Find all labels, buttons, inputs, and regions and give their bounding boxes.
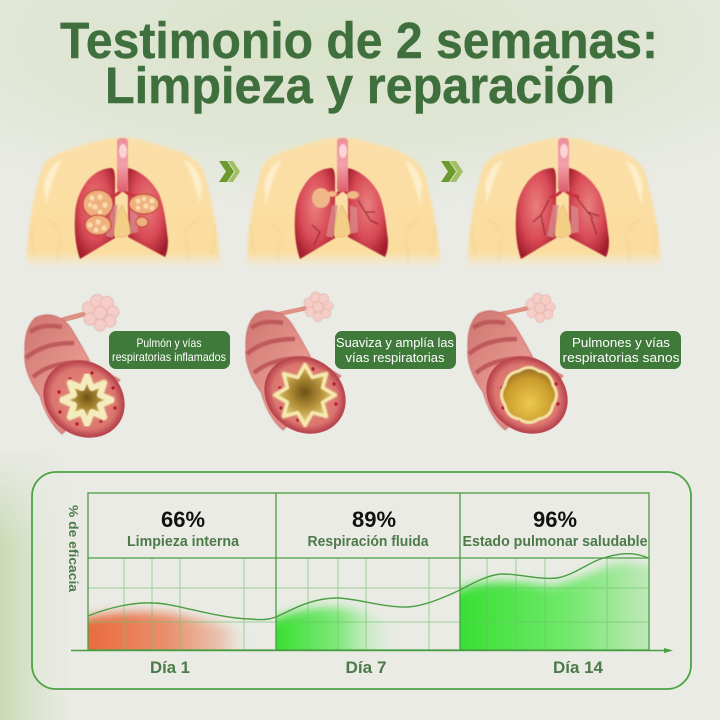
x axis day labels (150, 658, 604, 677)
label: stage 3: respiratorias sanos (562, 351, 680, 365)
x axis day labels: Día 7 (346, 658, 386, 677)
stat: day 14: Estado pulmonar saludable (462, 534, 648, 550)
title (60, 12, 658, 114)
label: stage 2: vías respiratorias (346, 351, 444, 365)
stat: day 14: 96% (533, 507, 577, 532)
label: stage 2: Suaviza y amplía las (336, 336, 454, 350)
title: Testimonio de 2 semanas: (60, 12, 658, 69)
stat: day 1 (127, 507, 240, 550)
lungs stage 1: inflamed torso (27, 138, 220, 268)
label: stage 3: Pulmones y vías (572, 336, 670, 350)
stat: day 1: 66% (161, 507, 205, 532)
area fill: day 14 green (460, 558, 648, 650)
stat: day 1: Limpieza interna (127, 534, 240, 550)
stat: day 14 (462, 507, 648, 550)
stat: day 7: 89% (352, 507, 396, 532)
stat: day 7 (308, 507, 429, 550)
arrow: stage 2 to 3 (441, 161, 463, 182)
title: Limpieza y reparación (105, 57, 615, 114)
label: stage 2 (335, 331, 456, 369)
area fill: day 1 orange (88, 605, 240, 650)
label: stage 1: Pulmón y vías (136, 336, 202, 350)
stat: day 7: Respiración fluida (308, 534, 429, 550)
area fill: day 7 green (276, 600, 384, 650)
arrow: stage 1 to 2 (219, 161, 240, 182)
airway stage 1: inflamed (25, 294, 139, 453)
efficacy curve (88, 554, 648, 620)
lungs stage 3: healthy torso (468, 138, 661, 268)
label: stage 3 (560, 331, 681, 369)
panel: efficacy chart (32, 472, 691, 689)
label: stage 1: respiratorias inflamados (112, 350, 226, 364)
label: stage 1 (109, 331, 230, 369)
airway stage 3: healthy (468, 293, 582, 449)
x axis day labels: Día 1 (150, 658, 190, 677)
x axis day labels: Día 14 (553, 658, 604, 677)
airway stage 2: softening (246, 292, 360, 449)
lungs stage 2: improving torso (247, 138, 440, 268)
y axis label: % de eficacia (66, 505, 81, 593)
chart frame (88, 493, 649, 650)
x axis arrow (71, 648, 673, 653)
grid lines (88, 558, 649, 650)
